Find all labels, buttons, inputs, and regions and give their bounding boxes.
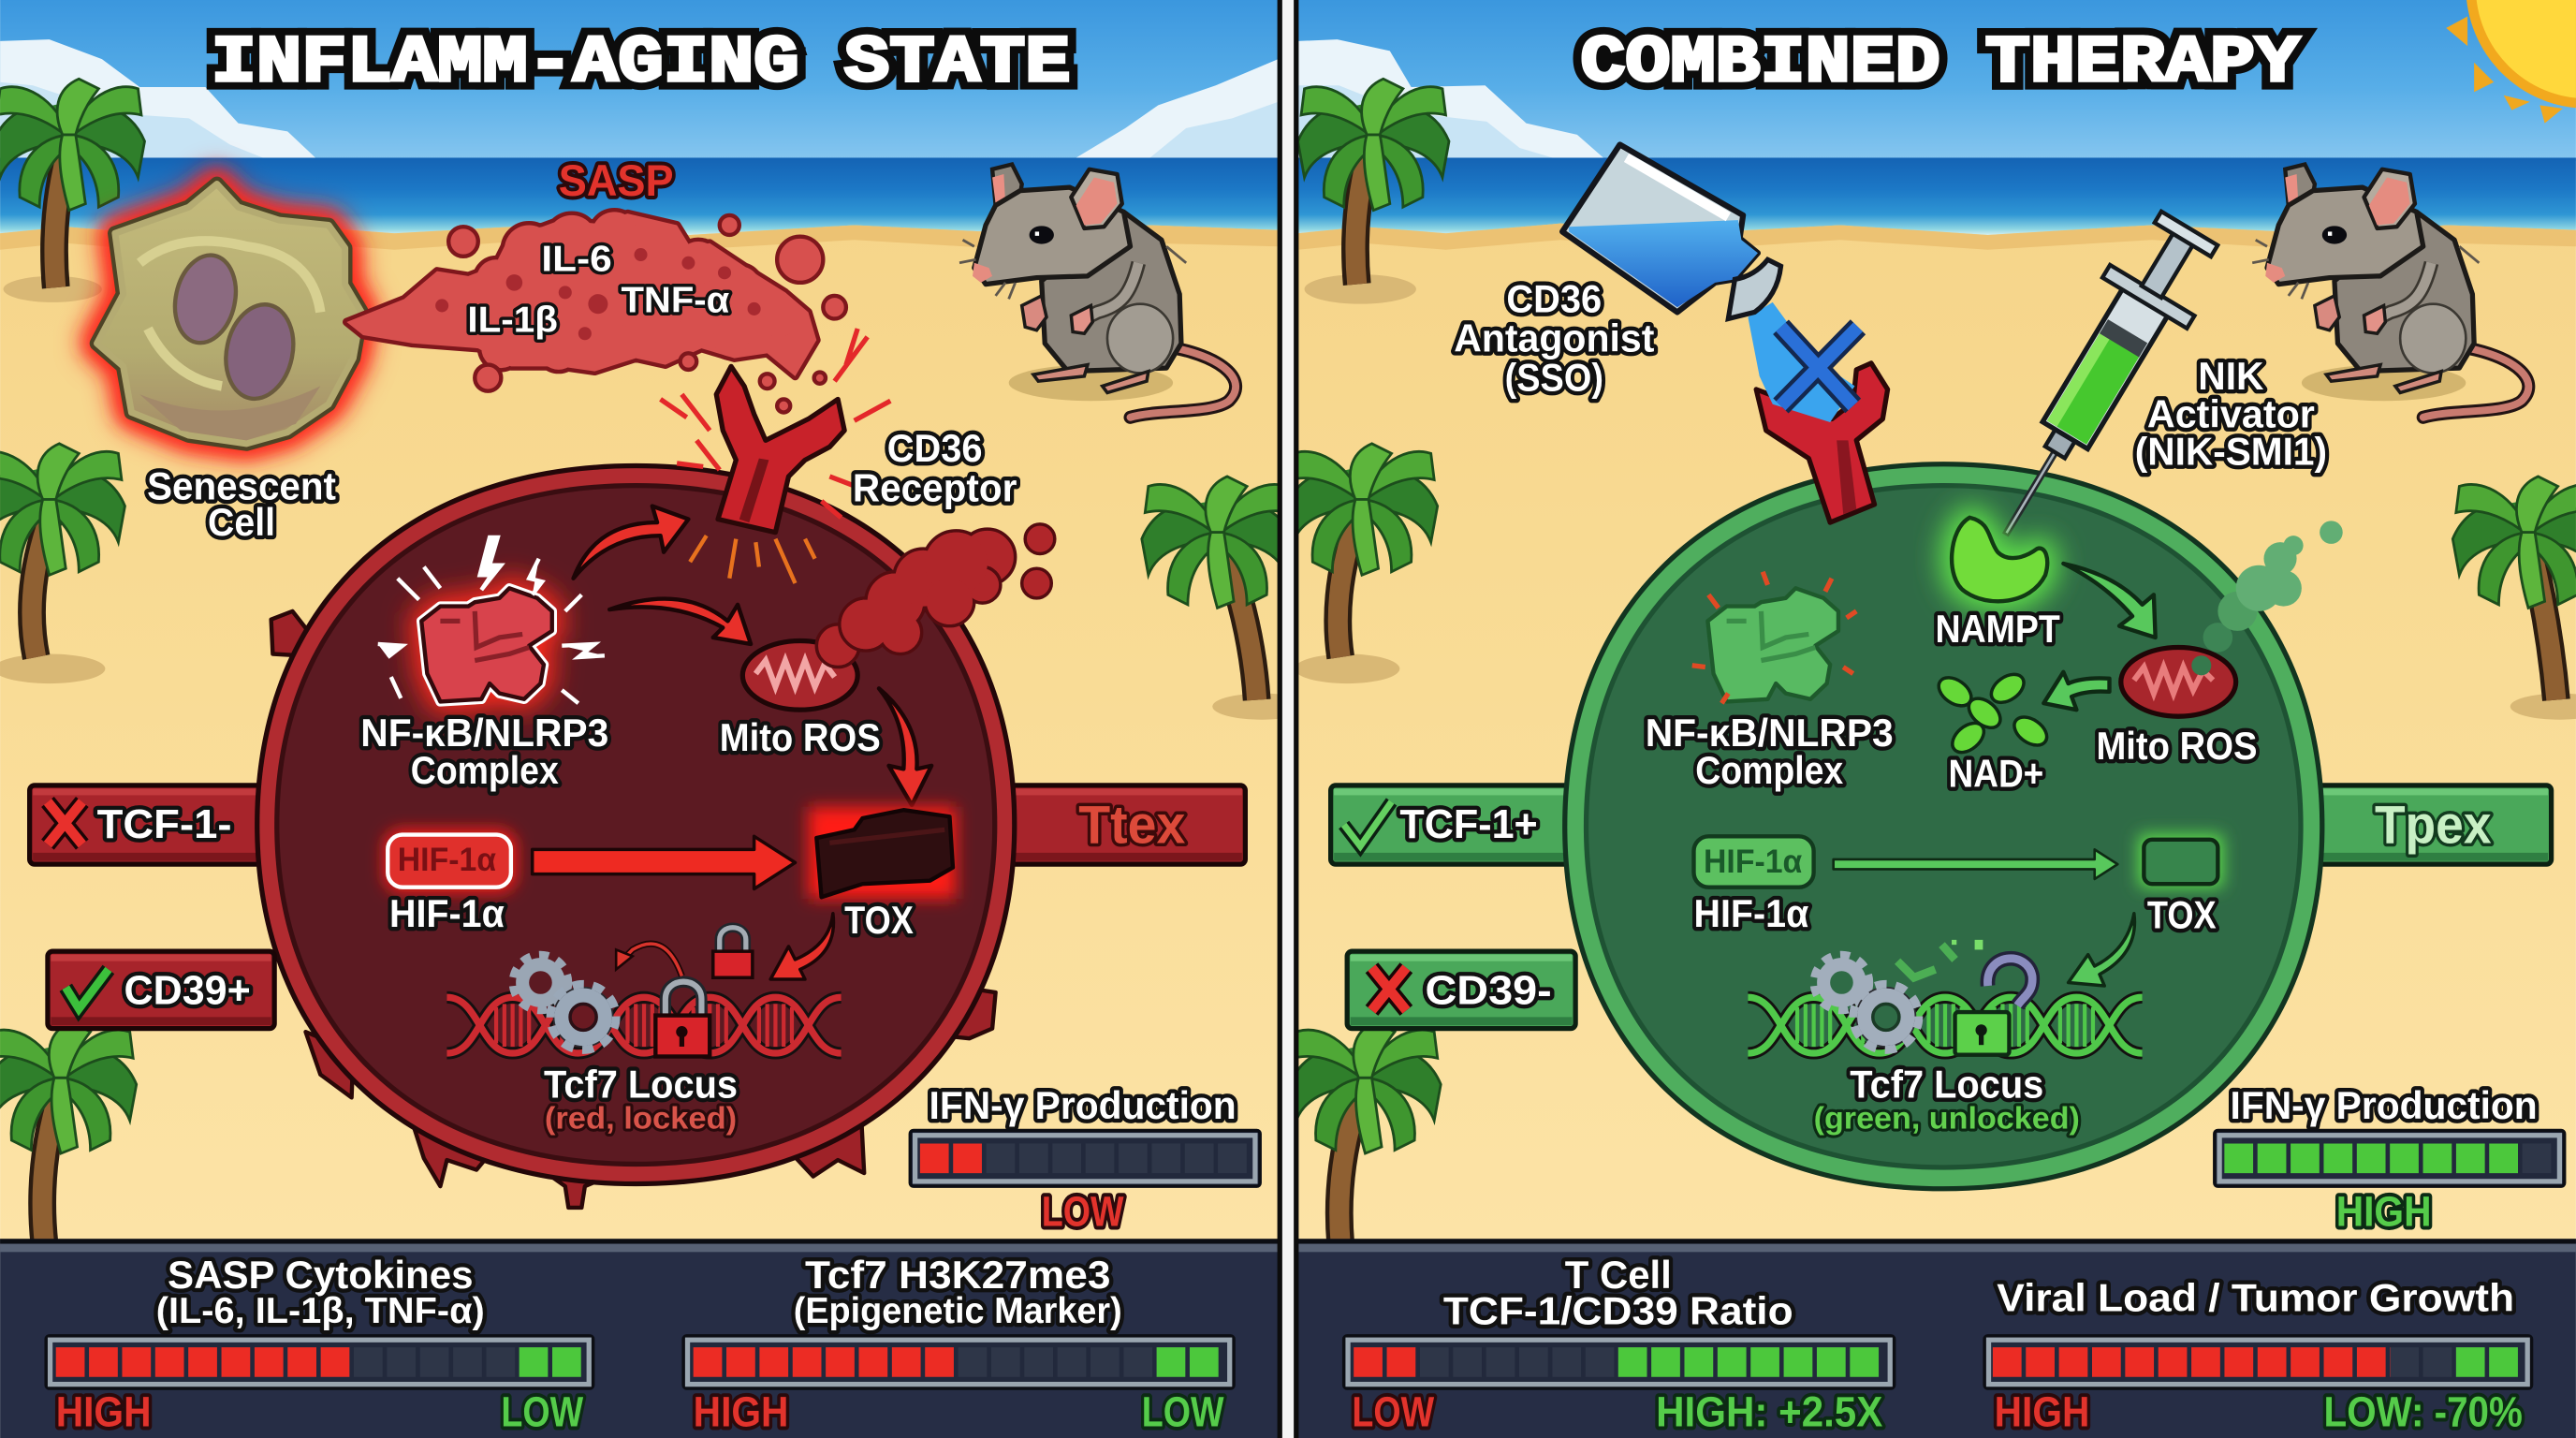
marker bar: TCF-1 positive xyxy=(1331,785,1610,864)
label: NF-kB/NLRP3 Complex: Complex xyxy=(1695,748,1844,792)
metric: SASP cytokines: (IL-6, IL-1β, TNF-α) xyxy=(156,1291,485,1331)
label: NF-kB/NLRP3 Complex xyxy=(1646,711,1894,792)
metric: Tcf7 H3K27me3: LOW xyxy=(1142,1387,1224,1435)
marker bar: TCF-1 negative xyxy=(27,783,256,867)
arrow: Mito to TOX xyxy=(879,688,931,805)
icon: HIF-1a pill: HIF-1α xyxy=(398,842,496,878)
icon: blue X block xyxy=(1781,327,1858,405)
IFN-gamma gauge: high xyxy=(2215,1130,2565,1186)
label: NF-kB/NLRP3 Complex: NF-κB/NLRP3 xyxy=(360,711,608,755)
bottom metrics panel: left xyxy=(0,1239,1278,1438)
label: NF-kB/NLRP3 Complex: NF-κB/NLRP3 xyxy=(1646,711,1894,755)
icon: syringe xyxy=(1964,203,2232,560)
metric: viral load / tumor growth: HIGH xyxy=(1995,1387,2089,1435)
marker bar: Ttex: Ttex xyxy=(1078,795,1185,855)
label: Tcf7 Locus: Tcf7 Locus xyxy=(1850,1062,2043,1106)
sand beach xyxy=(0,224,1278,1240)
arrow: Mito to NAD+ xyxy=(2043,672,2110,710)
marker bar: TCF-1 negative: TCF-1- xyxy=(97,801,232,847)
metric: SASP cytokines: HIGH xyxy=(56,1387,152,1435)
title: COMBINED THERAPY xyxy=(1580,27,2300,101)
label: TOX: TOX xyxy=(844,898,914,942)
label: HIF-1a: HIF-1α xyxy=(1693,891,1808,935)
arrow: TOX to DNA xyxy=(2069,914,2134,986)
label: TOX: TOX xyxy=(2147,893,2217,937)
palm tree: middle left xyxy=(1286,444,1438,683)
sea xyxy=(0,157,1278,237)
panel: Combined Therapy (right) xyxy=(1286,0,2576,1438)
label: NIK Activator: (NIK-SMI1) xyxy=(2135,430,2327,474)
label: CD36 Receptor: CD36 xyxy=(887,426,983,470)
icon: NAD+ molecules xyxy=(1934,668,2052,758)
mouse: aged xyxy=(959,165,1236,418)
label: red, locked: (red, locked) xyxy=(545,1102,737,1137)
label: NAMPT: NAMPT xyxy=(1935,607,2060,651)
metric: SASP cytokines: LOW xyxy=(501,1387,584,1435)
label: Senescent Cell xyxy=(147,464,336,544)
metric: T cell ratio: HIGH: +2.5X xyxy=(1656,1387,1883,1435)
label: NF-kB/NLRP3 Complex: Complex xyxy=(411,748,559,792)
metric: viral load / tumor growth xyxy=(1984,1276,2532,1435)
metric: viral load / tumor growth: LOW: -70% xyxy=(2324,1387,2523,1435)
arrow: TOX to DNA xyxy=(770,914,833,979)
label: Senescent Cell: Senescent xyxy=(147,464,336,508)
metric: T cell ratio xyxy=(1344,1253,1895,1435)
icon: NF-kB/NLRP3 complex xyxy=(378,537,605,703)
arrow: HIF-1a to TOX (weak) xyxy=(1834,849,2117,879)
marker badge: CD39 negative: CD39- xyxy=(1426,967,1552,1013)
arrow: NF-kB to CD36 xyxy=(574,506,688,579)
label: green, unlocked: (green, unlocked) xyxy=(1814,1102,2080,1137)
T cell: rejuvenated xyxy=(1562,462,2324,1191)
label: NF-kB/NLRP3 Complex xyxy=(360,711,608,792)
panel: Inflamm-Aging State (left) xyxy=(0,0,1311,1438)
mouse: treated xyxy=(2252,165,2528,418)
icon: HIF-1a pill xyxy=(1693,836,1814,888)
label: SASP: SASP xyxy=(559,156,674,206)
label: CD36 Antagonist: (SSO) xyxy=(1505,356,1603,400)
label: IFN-gamma production: IFN-γ Production xyxy=(2231,1083,2538,1127)
title: COMBINED THERAPY xyxy=(1580,27,2300,101)
title: INFLAMM-AGING STATE xyxy=(212,27,1070,101)
label: Mito ROS: Mito ROS xyxy=(2096,724,2257,768)
marker bar: TCF-1 positive: TCF-1+ xyxy=(1399,801,1538,847)
metric: T cell ratio: LOW xyxy=(1352,1387,1435,1435)
CD36 receptor xyxy=(661,329,890,583)
bottom metrics panel: right xyxy=(1298,1239,2576,1438)
label: Tcf7 Locus: Tcf7 Locus xyxy=(544,1062,738,1106)
label: IL-6: IL-6 xyxy=(541,240,612,280)
icon: HIF-1a pill: HIF-1α xyxy=(1704,844,1803,880)
arrow: NAMPT to Mito xyxy=(2063,564,2156,638)
label: NIK Activator: Activator xyxy=(2147,391,2315,435)
icon: mitochondrion with green smoke xyxy=(2121,521,2343,716)
palm tree: right xyxy=(2452,477,2576,720)
metric: SASP cytokines: SASP Cytokines xyxy=(168,1253,474,1297)
metric: viral load / tumor growth: Viral Load / Tumor Growth xyxy=(1997,1276,2514,1320)
icon: TOX block (small) xyxy=(2139,835,2223,888)
IFN-gamma gauge: low xyxy=(910,1130,1260,1186)
sky xyxy=(0,0,1278,161)
icon: HIF-1a pill xyxy=(385,829,516,892)
label: LOW: LOW xyxy=(1042,1187,1124,1235)
label: CD36 Antagonist: Antagonist xyxy=(1454,316,1654,360)
metric: Tcf7 H3K27me3: (Epigenetic Marker) xyxy=(794,1291,1122,1331)
palm tree: bottom left xyxy=(1290,1022,1441,1244)
icon: locked Tcf7 DNA with gears xyxy=(446,928,842,1056)
title: INFLAMM-AGING STATE xyxy=(212,27,1070,101)
marker badge: CD39 positive: CD39+ xyxy=(124,967,251,1013)
sun xyxy=(2446,0,2576,124)
label: NIK Activator: NIK xyxy=(2198,354,2264,398)
palm tree: top left xyxy=(0,79,145,302)
label: CD36 Receptor xyxy=(853,426,1017,509)
label: IFN-gamma production: IFN-γ Production xyxy=(929,1083,1237,1127)
icon: unlocked Tcf7 DNA with gears xyxy=(1748,940,2143,1055)
icon: TOX block xyxy=(809,807,956,899)
CD36 receptor blocked xyxy=(1756,363,1888,522)
label: IL-1 beta: IL-1β xyxy=(467,301,558,341)
metric: Tcf7 H3K27me3: Tcf7 H3K27me3 xyxy=(805,1253,1110,1297)
icon: mitochondrion with ROS smoke xyxy=(742,524,1055,710)
sky xyxy=(1298,0,2576,161)
icon: senescent cell xyxy=(97,184,361,444)
label: NAD+: NAD+ xyxy=(1949,752,2043,796)
metric: T cell ratio: T Cell xyxy=(1565,1253,1672,1297)
marker bar: Ttex xyxy=(970,785,1245,864)
arrow: NF-kB to Mito xyxy=(609,599,751,644)
marker bar: Tpex: Tpex xyxy=(2375,795,2492,855)
divider between panels xyxy=(1278,0,1298,1438)
label: CD36 Receptor: Receptor xyxy=(853,465,1017,509)
palm tree: middle left xyxy=(0,444,124,683)
marker bar: Tpex xyxy=(2276,785,2552,864)
marker badge: CD39 positive xyxy=(48,951,274,1029)
icon: NAMPT enzyme xyxy=(1952,518,2047,601)
palm tree: bottom left xyxy=(0,1022,137,1244)
sea xyxy=(1298,157,2576,237)
label: TNF-alpha: TNF-α xyxy=(621,280,730,320)
SASP cytokine cloud xyxy=(346,212,846,413)
metric: Tcf7 H3K27me3: HIGH xyxy=(694,1387,788,1435)
T cell: exhausted xyxy=(255,463,1017,1208)
clouds xyxy=(0,39,1278,157)
label: HIGH: HIGH xyxy=(2336,1187,2431,1235)
cloud xyxy=(1298,39,1603,157)
arrow: HIF-1a to TOX xyxy=(533,836,795,888)
palm tree: top left xyxy=(1298,79,1449,304)
palm tree: right xyxy=(1140,475,1278,720)
metric: T cell ratio: TCF-1/CD39 Ratio xyxy=(1443,1289,1793,1333)
marker badge: CD39 negative xyxy=(1347,951,1575,1029)
label: CD36 Antagonist: CD36 xyxy=(1506,276,1602,320)
metric: Tcf7 H3K27me3 xyxy=(683,1253,1234,1435)
label: HIF-1a: HIF-1α xyxy=(389,891,505,935)
label: Mito ROS: Mito ROS xyxy=(720,715,881,759)
icon: NF-kB/NLRP3 complex (quiet) xyxy=(1692,572,1856,703)
metric: SASP cytokines xyxy=(46,1253,593,1435)
label: Senescent Cell: Cell xyxy=(208,500,275,544)
sand beach xyxy=(1298,224,2576,1240)
icon: antagonist vial xyxy=(1562,144,1854,422)
label: CD36 Antagonist xyxy=(1454,276,1654,400)
label: NIK Activator xyxy=(2135,354,2327,474)
